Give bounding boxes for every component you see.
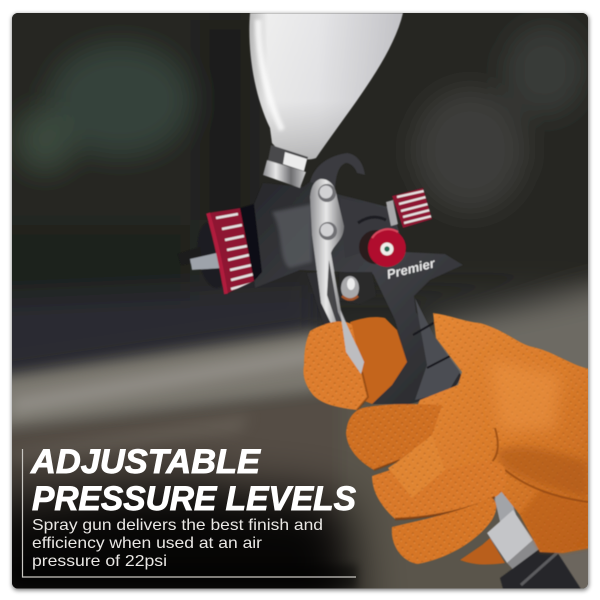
middle finger xyxy=(346,404,442,470)
little finger xyxy=(392,497,496,564)
index finger xyxy=(303,321,368,410)
text scrim gradient xyxy=(0,470,360,600)
brand label: Premier xyxy=(385,255,437,282)
spray gun xyxy=(178,13,590,589)
description text: pressure of 22psi xyxy=(32,553,167,570)
glove fingers and back of hand xyxy=(303,313,590,565)
trigger tip over glove xyxy=(340,310,364,374)
trigger xyxy=(307,179,364,374)
callout frame lines xyxy=(22,449,356,577)
knuckle xyxy=(388,452,430,498)
ring finger xyxy=(372,460,506,519)
hook xyxy=(310,153,365,190)
heading: ADJUSTABLE xyxy=(30,443,261,481)
fluid valve xyxy=(339,272,376,304)
red pressure button xyxy=(359,229,406,267)
paint cup xyxy=(249,13,403,159)
palm behind trigger xyxy=(350,317,407,404)
hose fitting and coupling xyxy=(487,484,581,589)
trigger screws xyxy=(318,184,337,240)
description text: efficiency when used at an air xyxy=(32,535,263,552)
heading xyxy=(30,443,356,518)
lower palm xyxy=(460,538,505,565)
description text: Spray gun delivers the best finish and xyxy=(32,517,323,534)
back of hand xyxy=(400,313,590,553)
description text xyxy=(32,517,323,570)
heading: PRESSURE LEVELS xyxy=(32,480,356,518)
rear adjustment knob xyxy=(386,188,432,228)
front red ring xyxy=(208,204,262,294)
gloved hand xyxy=(350,317,407,404)
nozzle xyxy=(179,222,222,288)
body and handle xyxy=(248,180,463,404)
collar xyxy=(263,145,308,188)
